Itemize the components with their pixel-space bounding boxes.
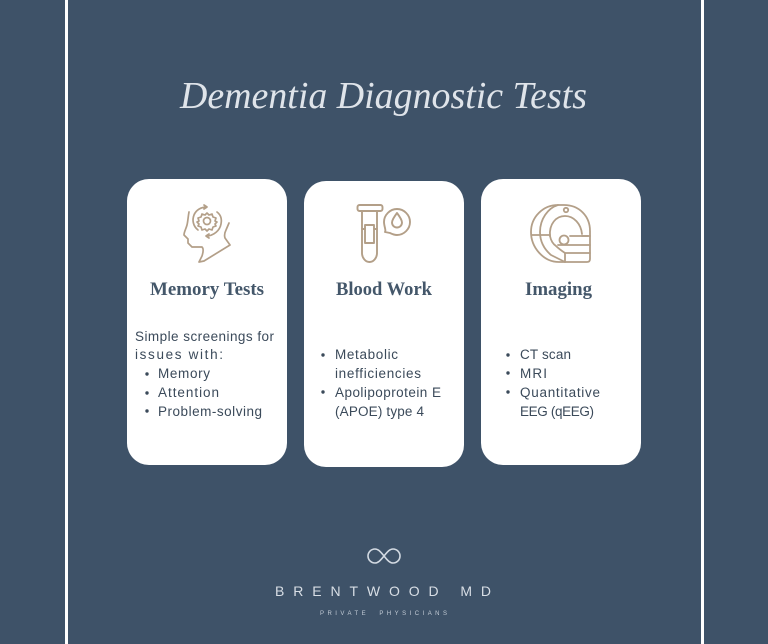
icon: head with gear — [184, 205, 230, 262]
logo wordmark: BRENTWOOD MD — [275, 583, 491, 599]
panel: imaging — [481, 179, 641, 465]
text block: imaging: MRI — [520, 366, 547, 381]
text block: memory tests: Simple screenings for — [135, 329, 274, 344]
panel: blood work — [304, 181, 464, 467]
text block: memory tests: Memory — [158, 366, 210, 381]
text block: imaging: Quantitative — [520, 385, 600, 400]
icon: MRI scanner — [531, 205, 590, 262]
text block: memory tests: Attention — [158, 385, 219, 400]
text block: imaging — [506, 347, 600, 419]
text block: memory tests: issues with: — [135, 347, 223, 362]
text block: blood work: inefficiencies — [335, 366, 421, 381]
logo tagline: PRIVATE PHYSICIANS — [320, 611, 447, 617]
text block: imaging: EEG (qEEG) — [520, 404, 594, 419]
text block: blood work: (APOE) type 4 — [335, 404, 424, 419]
heading: blood work: Blood Work — [336, 280, 433, 300]
text block: blood work: Metabolic — [335, 347, 398, 362]
logo: Brentwood MD — [275, 549, 491, 617]
text block: blood work — [321, 347, 441, 419]
text block: blood work: Apolipoprotein E — [335, 385, 441, 400]
icon: test tube and blood drop — [358, 205, 410, 262]
text block: memory tests — [135, 329, 274, 419]
text block: memory tests: Problem-solving — [158, 404, 262, 419]
title: Dementia Diagnostic Tests — [179, 75, 587, 117]
text block: imaging: CT scan — [520, 347, 571, 362]
heading: memory tests: Memory Tests — [150, 280, 264, 300]
panel: memory tests — [127, 179, 287, 465]
icon: infinity mark — [368, 549, 400, 563]
heading: imaging: Imaging — [525, 280, 593, 300]
